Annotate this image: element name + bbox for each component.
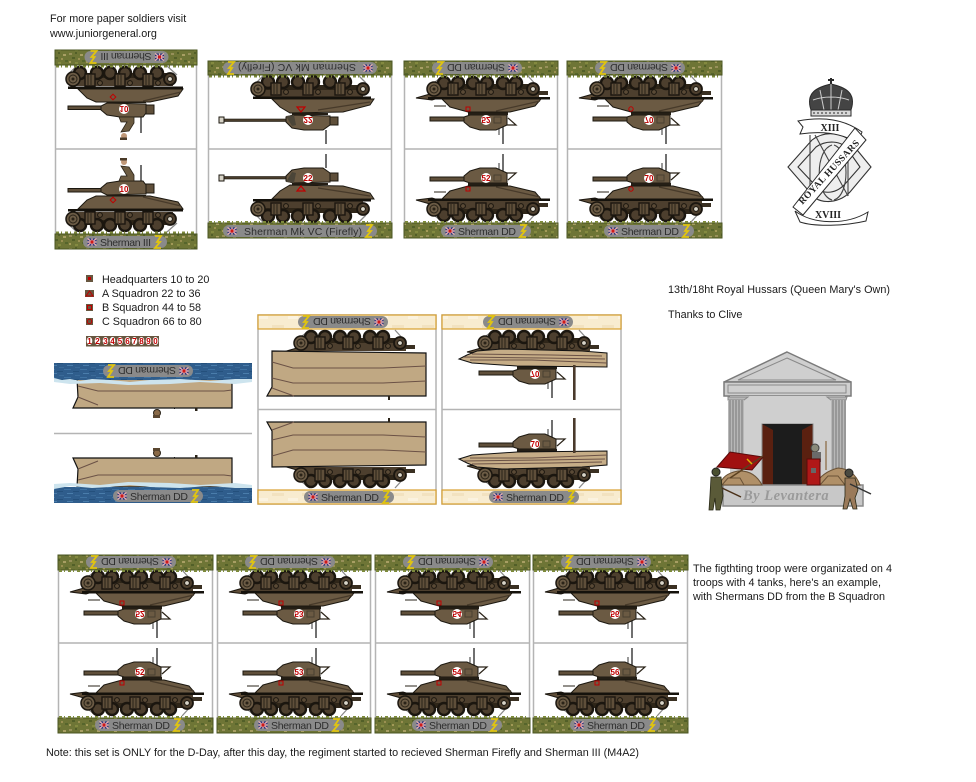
banner: top grass xyxy=(217,555,371,571)
crest crown xyxy=(809,78,853,116)
tank: DD bottom xyxy=(579,154,713,222)
banner: bottom grass: Sherman DD xyxy=(587,720,645,732)
banner: bottom grass xyxy=(567,222,722,238)
tank: DD bottom: 54 xyxy=(453,668,462,677)
card: Sherman DD 56 (B Squadron) xyxy=(533,555,688,733)
banner: top grass: Sherman DD xyxy=(260,555,318,567)
banner: bottom sand: Sherman DD xyxy=(321,492,379,504)
plinth with signature xyxy=(723,485,863,506)
banner: top grass: Sherman DD xyxy=(418,555,476,567)
number strip: 9 xyxy=(146,337,151,346)
banner: bottom grass xyxy=(404,222,558,238)
banner: bottom grass xyxy=(58,717,213,733)
crest bottom scroll: XVIII xyxy=(815,210,841,221)
number strip: 3 xyxy=(103,337,108,346)
banner: top grass: Sherman DD xyxy=(576,555,634,567)
legend item: Headquarters: Headquarters 10 to 20 xyxy=(102,274,209,286)
temple door xyxy=(762,424,813,486)
card: Sherman DD 52 (B Squadron) xyxy=(58,555,213,733)
tank: Firefly bottom: 22 xyxy=(304,174,313,183)
number strip: 7 xyxy=(132,337,137,346)
number strip: 0 xyxy=(153,337,158,346)
screen: raised top (mirrored) xyxy=(73,379,232,418)
crest diagonal ribbon: ROYAL HUSSARS xyxy=(797,138,862,207)
legend item: C Squadron: C Squadron 66 to 80 xyxy=(102,316,202,328)
crest bottom scroll xyxy=(795,210,868,225)
tank: DD top (mirrored): 54 xyxy=(453,609,462,618)
text: website note xyxy=(49,13,186,40)
banner: top grass: Sherman DD xyxy=(610,61,668,73)
banner: bottom grass: Sherman DD xyxy=(271,720,329,732)
number strip: 2 xyxy=(95,337,100,346)
number strip: 6 xyxy=(125,337,130,346)
banner: top grass xyxy=(55,50,197,66)
banner: bottom water: Sherman DD xyxy=(130,491,188,503)
tank: DD top (mirrored) xyxy=(545,570,679,638)
tank: DD top (mirrored) xyxy=(70,570,204,638)
text: troop organization note: with Shermans DD from the B Squadron xyxy=(692,591,885,603)
tank: DD top (mirrored): 52 xyxy=(136,609,145,618)
screen: raised bottom xyxy=(73,448,232,487)
tank: DD bottom xyxy=(229,648,363,716)
soldier right xyxy=(843,469,871,509)
tank: Sherman III bottom xyxy=(66,158,183,232)
banner: top grass: Sherman DD xyxy=(101,555,159,567)
roman legionary xyxy=(807,441,826,485)
tank: DD bottom: 52 xyxy=(482,174,491,183)
temple wall and columns xyxy=(728,396,847,486)
crest: 13th/18th Royal Hussars xyxy=(788,78,871,225)
banner: bottom grass xyxy=(375,717,530,733)
text: website note: For more paper soldiers visit xyxy=(50,13,186,25)
tank: raised screen bottom xyxy=(267,418,426,488)
banner: bottom sand: Sherman DD xyxy=(506,492,564,504)
legend: squadrons xyxy=(85,274,209,346)
tank: lowered screen bottom: 70 xyxy=(531,440,540,449)
tank: DD top (mirrored): 56 xyxy=(611,609,620,618)
crest monogram xyxy=(788,134,871,202)
number strip: 5 xyxy=(118,337,123,346)
banner: bottom grass: Sherman DD xyxy=(458,226,516,238)
tank: Firefly top (mirrored): 22 xyxy=(304,115,313,124)
tank: DD bottom: 70 xyxy=(645,174,654,183)
tank: DD top (mirrored): 53 xyxy=(295,609,304,618)
card: Sherman Mk VC (Firefly) xyxy=(208,61,392,238)
banner: top grass xyxy=(208,61,392,76)
card: Sherman DD 70 xyxy=(567,61,722,238)
card: Sherman DD screen lowered (sand) xyxy=(442,315,621,504)
tank: Sherman III top (mirrored): 10 xyxy=(120,104,129,113)
text: footnote: Note: this set is ONLY for the D-Day, after this day, the regiment started to recieved Sherman Firefly and Sherman III (M4A2) xyxy=(46,747,639,759)
banner: bottom grass xyxy=(55,232,197,249)
tank: DD top (mirrored) xyxy=(416,76,550,144)
text: regiment name: 13th/18ht Royal Hussars (Queen Mary's Own) xyxy=(668,284,890,296)
tank: DD top (mirrored): 70 xyxy=(645,115,654,124)
banner: top water: Sherman DD xyxy=(118,364,176,376)
soldier with rifle xyxy=(709,468,741,510)
tank: DD top (mirrored) xyxy=(579,76,713,144)
crest diagonal ribbon xyxy=(793,128,866,215)
tank: lowered screen bottom xyxy=(459,418,607,488)
card: Sherman DD 53 (B Squadron) xyxy=(217,555,371,733)
banner: top sand: Sherman DD xyxy=(313,315,371,327)
tank: Sherman III bottom: 10 xyxy=(120,185,129,194)
banner: bottom sand xyxy=(442,490,621,504)
banner: bottom grass: Sherman DD xyxy=(621,226,679,238)
banner: bottom grass xyxy=(533,717,688,733)
number strip xyxy=(86,336,159,346)
plinth with signature: By Levantera xyxy=(742,488,829,504)
tank: raised screen top (mirrored) xyxy=(267,330,426,400)
tank: lowered screen top (mirrored): 70 xyxy=(531,369,540,378)
crest top scroll xyxy=(798,119,862,143)
sandbags xyxy=(720,468,860,485)
card: Sherman DD 54 (B Squadron) xyxy=(375,555,530,733)
tank: Firefly top (mirrored) xyxy=(219,75,374,144)
banner: bottom water xyxy=(54,482,252,503)
banner: bottom grass: Sherman DD xyxy=(112,720,170,732)
banner: top grass: Sherman III xyxy=(100,50,152,62)
text: thanks: Thanks to Clive xyxy=(668,309,742,321)
legend item: B Squadron: B Squadron 44 to 58 xyxy=(102,302,201,314)
card: Sherman DD on water xyxy=(54,363,252,503)
banner: top grass: Sherman Mk VC (Firefly) xyxy=(238,61,356,73)
banner: top water xyxy=(54,363,252,385)
text: troop organization note: troops with 4 tanks, here's an example, xyxy=(693,577,881,589)
banner: top grass xyxy=(404,61,558,76)
card: Sherman III xyxy=(55,50,197,249)
tank: DD bottom xyxy=(387,648,521,716)
banner: top sand: Sherman DD xyxy=(498,315,556,327)
banner: bottom grass xyxy=(208,222,392,238)
banner: bottom grass: Sherman III xyxy=(100,237,151,249)
number strip: 1 xyxy=(87,337,92,346)
banner: bottom sand xyxy=(258,490,436,504)
number strip: 8 xyxy=(139,337,144,346)
tank: DD bottom: 52 xyxy=(136,668,145,677)
banner: top grass xyxy=(58,555,213,571)
banner: top sand xyxy=(442,315,621,329)
crest top scroll: XIII xyxy=(821,123,840,134)
card: Sherman DD 52 xyxy=(404,61,558,238)
temple roof xyxy=(724,352,851,396)
banner: top grass xyxy=(567,61,722,76)
illustration: By Levantera temple xyxy=(709,352,871,510)
tank: DD bottom: 53 xyxy=(295,668,304,677)
tank: DD top (mirrored): 52 xyxy=(482,115,491,124)
legend item: A Squadron: A Squadron 22 to 36 xyxy=(102,288,200,300)
tank: DD bottom xyxy=(70,648,204,716)
red flag xyxy=(717,452,763,478)
banner: top grass xyxy=(375,555,530,571)
banner: top grass xyxy=(533,555,688,571)
tank: Firefly bottom xyxy=(219,154,374,223)
tank: Sherman III top (mirrored) xyxy=(66,66,183,140)
text: troop organization note xyxy=(692,563,892,603)
banner: top sand xyxy=(258,315,436,329)
banner: bottom grass: Sherman DD xyxy=(429,720,487,732)
number strip: 4 xyxy=(110,337,115,346)
banner: top grass: Sherman DD xyxy=(447,61,505,73)
banner: bottom grass xyxy=(217,717,371,733)
tank: DD top (mirrored) xyxy=(229,570,363,638)
card: Sherman DD screen raised (sand) xyxy=(258,315,436,504)
tank: DD bottom: 56 xyxy=(611,668,620,677)
tank: DD bottom xyxy=(416,154,550,222)
text: troop organization note: The figthting troop were organizated on 4 xyxy=(693,563,892,575)
tank: lowered screen top (mirrored) xyxy=(459,330,607,400)
tank: DD bottom xyxy=(545,648,679,716)
text: website note: www.juniorgeneral.org xyxy=(49,28,157,40)
tank: DD top (mirrored) xyxy=(387,570,521,638)
banner: bottom grass: Sherman Mk VC (Firefly) xyxy=(244,226,362,238)
